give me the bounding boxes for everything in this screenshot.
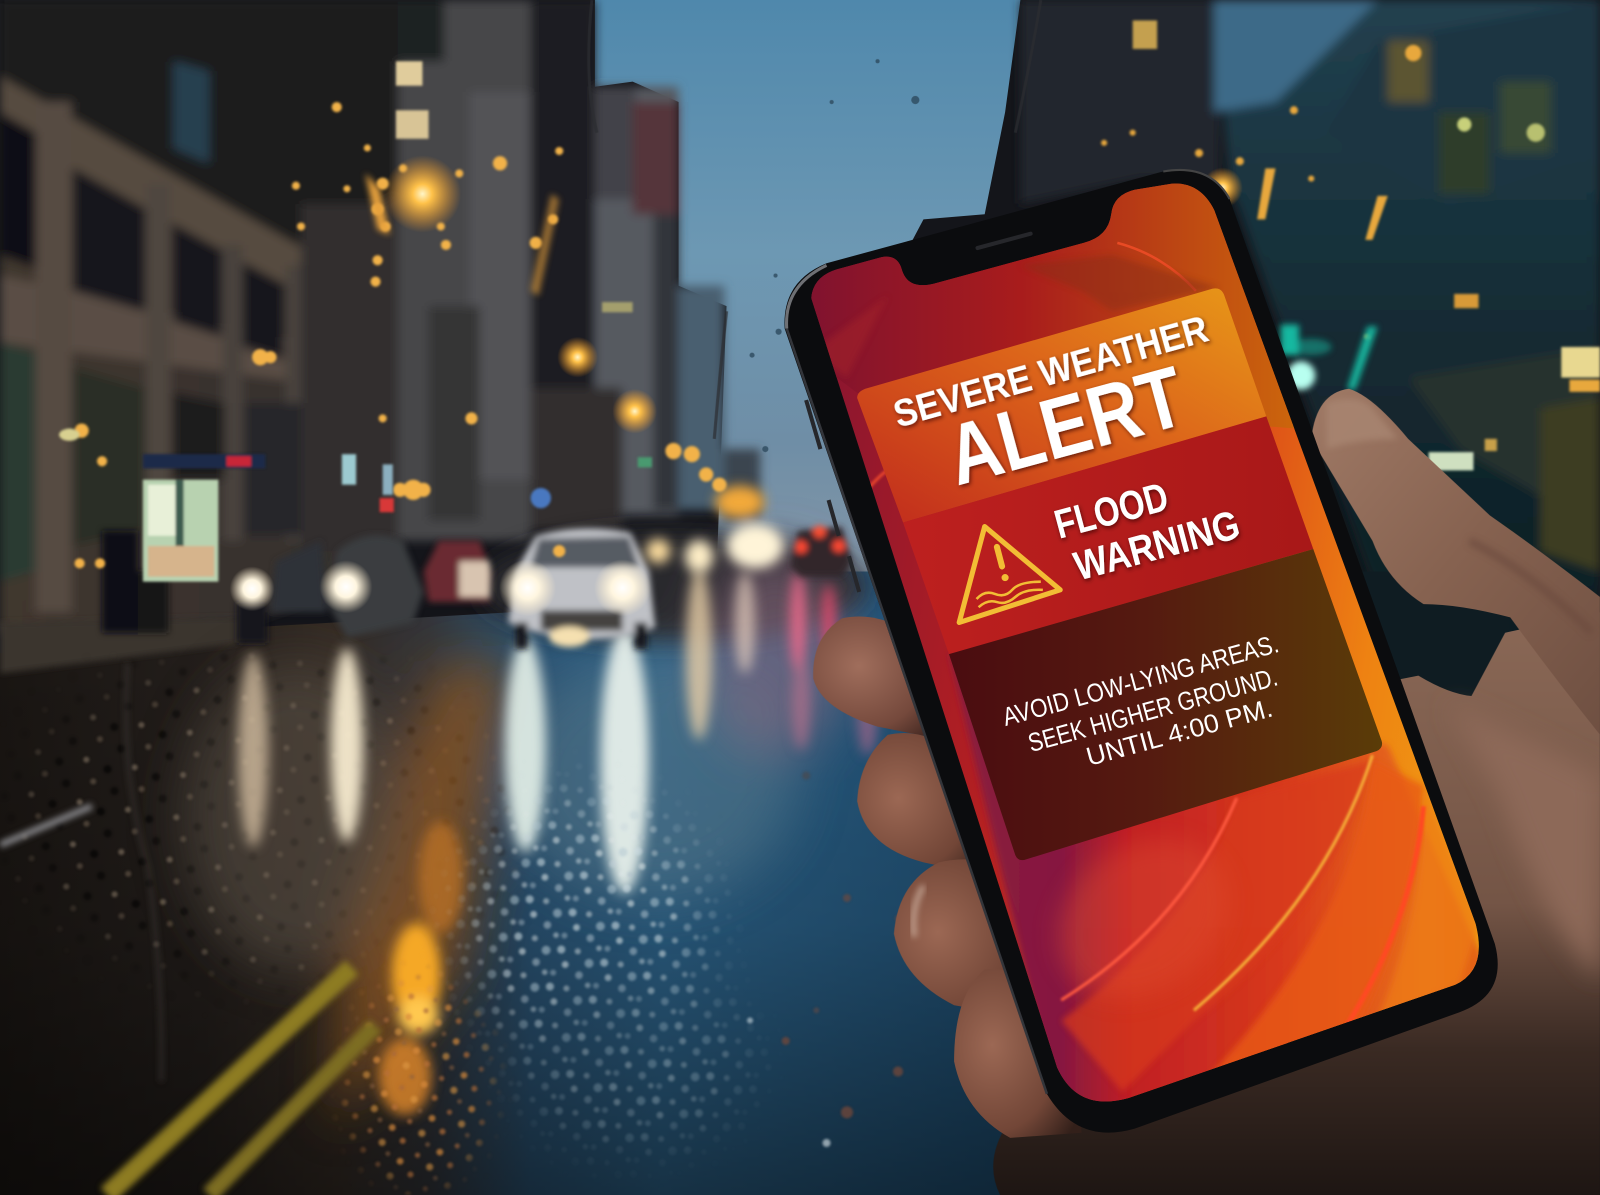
text: flood warning: WARNING bbox=[1069, 501, 1245, 589]
right side lights bbox=[1101, 20, 1600, 470]
finger 3 bbox=[894, 859, 1041, 1020]
text: instructions: UNTIL 4:00 PM. bbox=[1083, 693, 1276, 772]
text: instructions: AVOID LOW-LYING AREAS. bbox=[999, 628, 1282, 732]
sidewalk bbox=[0, 617, 245, 674]
road marking: yellow lines bbox=[0, 663, 376, 1195]
car: dark vehicles left lane bbox=[102, 531, 492, 643]
thumb bbox=[1311, 389, 1600, 735]
bus shelter ad panel bbox=[143, 454, 265, 582]
finger 2 bbox=[857, 733, 995, 878]
screen: arcs bbox=[811, 243, 1423, 1026]
road reflections bbox=[0, 0, 1122, 1195]
text: instructions: SEEK HIGHER GROUND. bbox=[1025, 662, 1281, 758]
panel: safety instructions bbox=[949, 549, 1382, 860]
panel: flood warning band bbox=[903, 416, 1313, 654]
building: central towers bbox=[301, 204, 398, 551]
buildings: street right side bbox=[1020, 0, 1600, 694]
traffic: cars on street bbox=[102, 486, 852, 649]
title: severe weather: SEVERE WEATHER bbox=[889, 308, 1213, 435]
hand: palm and thumb bbox=[993, 389, 1600, 1195]
buildings: street left side bbox=[0, 0, 760, 633]
road bbox=[0, 531, 1429, 1195]
car: red tail lights bbox=[791, 526, 852, 577]
street lamps and bokeh lights bbox=[59, 0, 1243, 568]
phone speaker bbox=[978, 234, 1031, 248]
finger 4 bbox=[954, 969, 1082, 1138]
panel: alert headline bbox=[857, 288, 1266, 522]
rain drops on glass bbox=[589, 0, 1041, 439]
text: flood warning: FLOOD bbox=[1050, 473, 1173, 548]
building: left facade bbox=[0, 0, 398, 633]
distant headlights bbox=[646, 486, 784, 572]
phone side buttons bbox=[806, 400, 859, 592]
hand: fingers behind phone bbox=[813, 617, 1082, 1138]
car: white sedan bbox=[508, 528, 655, 649]
sky bbox=[595, 0, 1020, 633]
phone screen bbox=[796, 173, 1510, 1123]
screen: top gradient bbox=[796, 173, 1296, 429]
title: alert: ALERT bbox=[937, 348, 1195, 504]
phone bbox=[784, 170, 1510, 1133]
text: instructions bbox=[999, 628, 1282, 772]
finger 1 bbox=[813, 617, 944, 740]
text: flood warning bbox=[1050, 473, 1245, 589]
phone body bbox=[784, 170, 1498, 1133]
icon: flood warning triangle bbox=[959, 527, 1060, 623]
screen: lower swirl bbox=[948, 656, 1479, 1102]
